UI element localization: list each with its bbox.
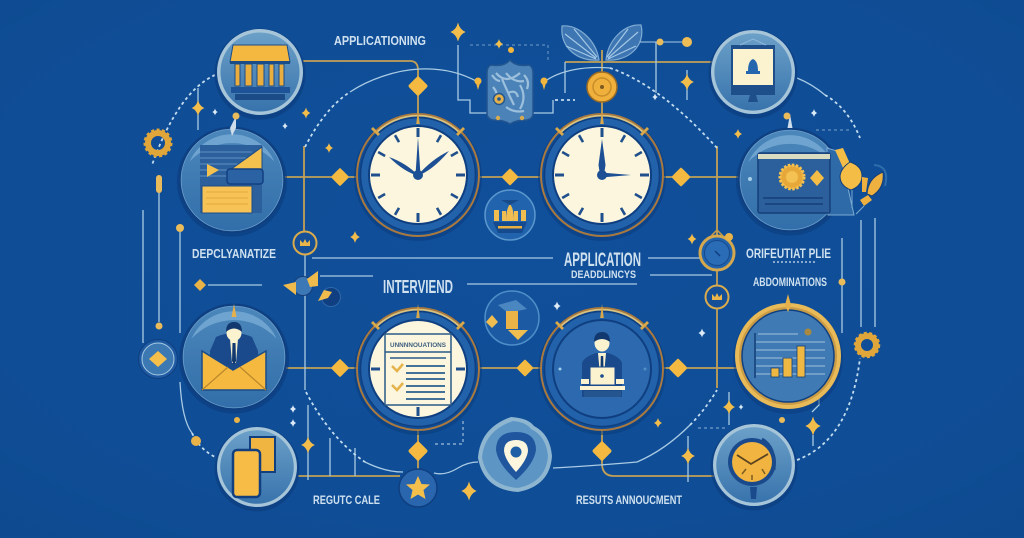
icon: watch pin dot	[779, 417, 785, 423]
panel: monitor icon	[708, 30, 798, 119]
icon: phone connector dots	[191, 417, 240, 446]
node diamonds	[331, 76, 690, 461]
heading: application deadlines: APPLICATION	[564, 250, 641, 271]
badge: graduate lower	[485, 291, 539, 345]
label: orientation: ORIFEUTIAT PLIE	[746, 245, 831, 261]
panel: map pin icon	[478, 417, 552, 492]
icon: gold seal	[587, 72, 617, 102]
panel: watch icon	[711, 424, 797, 511]
icon: small medal right	[706, 286, 728, 308]
sparkles: gold	[192, 22, 821, 500]
icon: wings	[562, 25, 642, 60]
icon: capsule and dots left	[156, 175, 184, 330]
icon: gear right	[855, 333, 879, 357]
label: orientation	[746, 245, 831, 262]
panel: browser and petals icon right	[736, 114, 886, 236]
panel: bar chart icon	[733, 294, 843, 414]
heading: interview: INTERVIEND	[383, 277, 453, 297]
panel: document icon left	[177, 116, 287, 237]
icon: gold diamond left	[194, 279, 206, 291]
clock: second	[538, 110, 666, 241]
sparkles: white	[212, 94, 817, 427]
clock: document checklist	[354, 304, 482, 435]
icon: megaphone cluster	[283, 271, 340, 306]
icon: seal side pins	[474, 47, 548, 90]
clock: person with laptop	[538, 304, 666, 435]
label: abdominations: ABDOMINATIONS	[753, 275, 827, 289]
icon: central seal	[487, 60, 533, 124]
panel: bank icon	[214, 29, 306, 120]
clock: document checklist: UNNNNOUATIONS	[390, 342, 447, 349]
panel: envelope icon	[179, 303, 289, 414]
heading: applicationing label: APPLICATIONING	[334, 34, 426, 48]
heading: application deadlines	[564, 250, 641, 281]
heading: application deadlines: DEADDLINCYS	[571, 269, 636, 281]
label: deployment: DEPCLYANATIZE	[192, 246, 276, 261]
label: result scale: REGUTC CALE	[313, 493, 380, 507]
connector lines: gold	[284, 50, 740, 476]
icon: pin above document	[232, 112, 240, 120]
connector lines: pale	[143, 42, 875, 482]
icon: stopwatch right	[700, 230, 734, 270]
icon: top nodes	[640, 37, 692, 47]
panel: star disc	[399, 469, 437, 507]
panel: small diamond disc	[138, 340, 178, 378]
icon: pin above browser	[784, 112, 790, 120]
panel: phone icon	[215, 427, 299, 511]
clock: first	[354, 110, 482, 241]
icon: dot near abdominations	[838, 278, 846, 286]
badge: centre graduation	[485, 190, 535, 240]
icon: small medal left	[294, 232, 316, 254]
icon: gear left	[145, 130, 171, 156]
dashed connectors	[152, 45, 860, 462]
label: results announcement: RESUTS ANNOUCMENT	[576, 493, 683, 507]
